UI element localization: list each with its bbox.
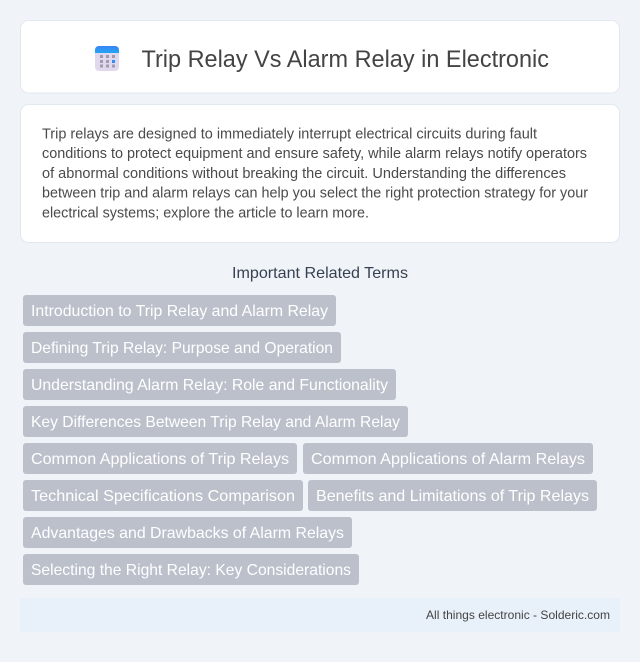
intro paragraph: between trip and alarm relays can help you select the right protection strategy for your [42,186,588,202]
tag: Introduction to Trip Relay and Alarm Relay [31,303,328,320]
tag: Advantages and Drawbacks of Alarm Relays [31,525,344,542]
header panel [20,20,620,93]
tag: Common Applications of Alarm Relays [311,451,585,468]
tag [308,480,597,511]
intro paragraph: electrical systems; explore the article to learn more. [42,206,369,222]
tag [23,443,297,474]
icon: calendar [95,46,119,71]
tags list [23,295,597,585]
intro paragraph: conditions to protect equipment and ensure safety, while alarm relays notify operators [42,146,587,162]
tag [23,332,341,363]
footer credit: All things electronic - Solderic.com [426,608,610,622]
tag [303,443,593,474]
tag: Selecting the Right Relay: Key Considerations [31,562,351,579]
intro paragraph: Trip relays are designed to immediately interrupt electrical circuits during fault [42,126,537,142]
intro paragraph [42,126,588,222]
title: Trip Relay Vs Alarm Relay in Electronic [142,46,549,73]
tag [23,406,408,437]
tag: Key Differences Between Trip Relay and Alarm Relay [31,414,400,431]
tag: Technical Specifications Comparison [31,488,295,505]
tag: Understanding Alarm Relay: Role and Functionality [31,377,388,394]
tag: Benefits and Limitations of Trip Relays [316,488,589,505]
tag [23,517,352,548]
tag: Defining Trip Relay: Purpose and Operation [31,340,333,357]
intro paragraph: of abnormal conditions without breaking the circuit. Understanding the differences [42,166,566,182]
tag: Common Applications of Trip Relays [31,451,289,468]
footer [20,598,620,632]
tag [23,295,336,326]
tag [23,480,303,511]
tag [23,369,396,400]
intro text panel [20,104,620,242]
heading: important related terms: Important Related Terms [232,265,408,282]
tag [23,554,359,585]
